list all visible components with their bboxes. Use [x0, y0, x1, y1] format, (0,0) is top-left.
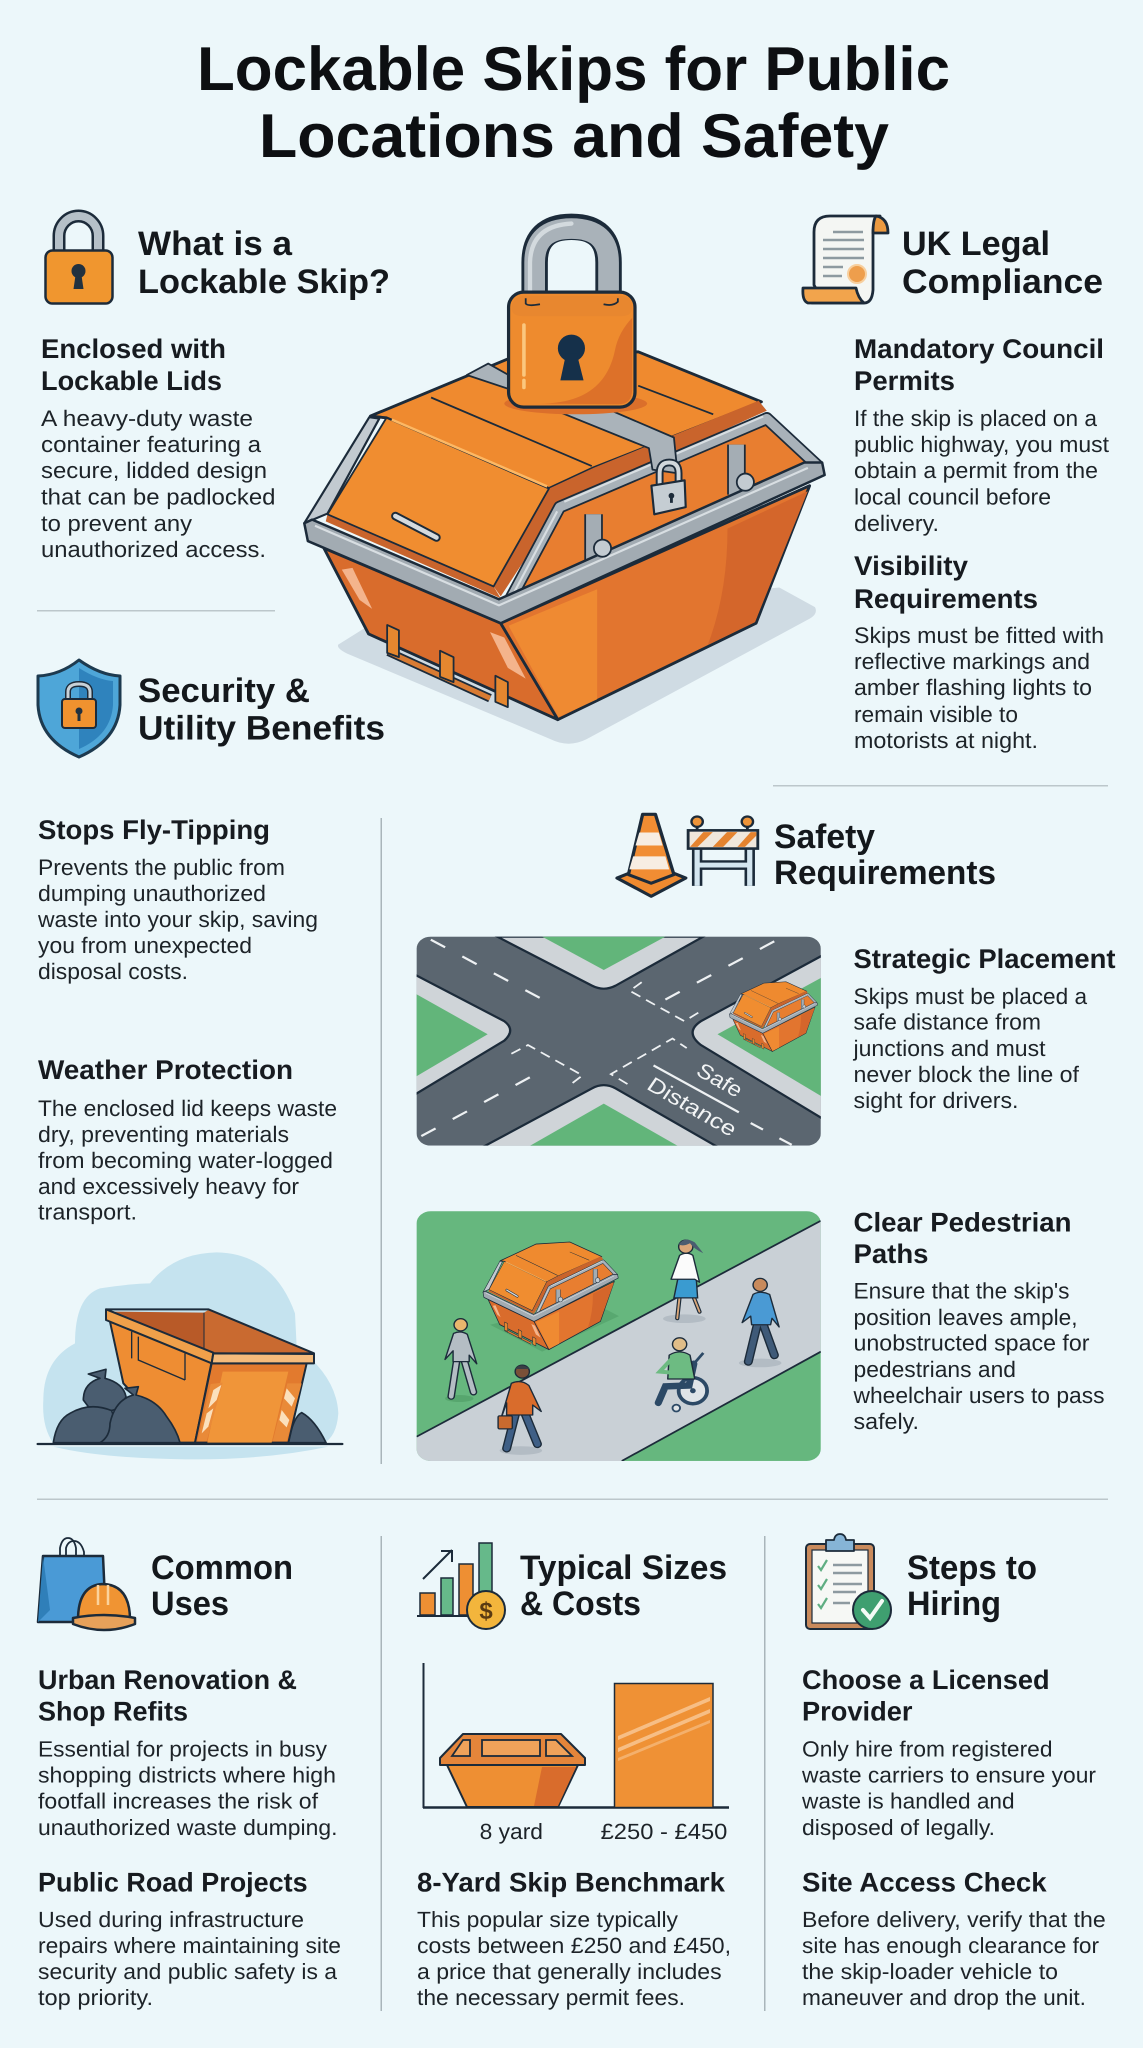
subheading: visibility requirements: Visibility: [854, 551, 968, 581]
title: Locations and Safety: [259, 102, 890, 171]
subheading: [41, 334, 226, 396]
text: strategic placement: never block the line of: [854, 1062, 1080, 1087]
body text: licensed provider: Only hire from registered: [802, 1737, 1052, 1762]
icon: skip on road corner: [729, 982, 818, 1052]
icon: skip beside pavement: [483, 1242, 618, 1350]
blue pedestrian: [742, 1278, 779, 1362]
heading: Utility Benefits: [138, 710, 385, 748]
body text: to prevent any: [41, 511, 193, 536]
body text: licensed provider: disposed of legally.: [802, 1815, 995, 1840]
body text: unauthorized access.: [41, 537, 266, 562]
icon: clipboard with check: [806, 1534, 891, 1629]
text: clear pedestrian paths: pedestrians and: [854, 1357, 1016, 1382]
subheading: mandatory council permits: Permits: [854, 366, 955, 396]
body text: licensed provider: waste carriers to ensure your: [801, 1763, 1096, 1788]
body text: permits: delivery.: [854, 511, 939, 536]
subheading: site access check: Site Access Check: [802, 1868, 1048, 1898]
skip shadow: [338, 587, 816, 744]
body text: visibility: reflective markings and: [854, 649, 1090, 674]
lock shadow on lid: [504, 393, 647, 414]
body text: licensed provider: [801, 1737, 1096, 1840]
body text: licensed provider: waste is handled and: [801, 1789, 1015, 1814]
body text: container featuring a: [41, 432, 262, 457]
text: strategic placement: Strategic Placement: [854, 944, 1116, 974]
body text: benchmark: costs between £250 and £450,: [417, 1933, 731, 1958]
heading: Safety: [774, 818, 875, 856]
subheading: licensed provider: Choose a Licensed: [802, 1665, 1050, 1695]
body text: visibility: remain visible to: [854, 702, 1018, 727]
body text: permits: obtain a permit from the: [854, 458, 1098, 483]
body text: public road projects: top priority.: [38, 1985, 153, 2010]
heading: Hiring: [907, 1585, 1001, 1623]
body text: fly-tipping: waste into your skip, saving: [37, 907, 318, 932]
icon: shopping bag and hard hat: [38, 1538, 135, 1630]
text: clear pedestrian paths: position leaves ample,: [854, 1305, 1078, 1330]
subheading: urban renovation: Urban Renovation &: [38, 1665, 297, 1695]
text: clear pedestrian paths: wheelchair users to pass: [852, 1383, 1104, 1408]
heading: [520, 1549, 727, 1623]
cost bar: [614, 1684, 713, 1808]
subheading: Lockable Lids: [41, 366, 222, 396]
body text: site access check: site has enough clearance for: [802, 1933, 1099, 1958]
heading: [902, 225, 1103, 301]
body text: permits: [854, 406, 1110, 536]
safe distance label: Distance: [643, 1073, 741, 1141]
metal strap: [467, 364, 677, 473]
body text: fly-tipping: dumping unauthorized: [38, 881, 266, 906]
panel: common uses: [38, 1538, 341, 2010]
panel: steps to hiring: [801, 1534, 1106, 2010]
icon: shield: [38, 660, 120, 757]
title: [197, 35, 950, 171]
icon: padlock: [46, 216, 112, 304]
body text: visibility: Skips must be fitted with: [854, 623, 1104, 648]
body text: weather: and excessively heavy for: [38, 1174, 300, 1199]
heading: [774, 818, 996, 892]
illustration: pedestrian path: [417, 1211, 821, 1461]
subheading: Enclosed with: [41, 334, 226, 364]
subheading: licensed provider: [802, 1665, 1050, 1727]
panel: UK legal compliance: [803, 216, 1110, 753]
grey pedestrian: [445, 1319, 477, 1396]
bar chart: skip size and cost: 8 yard: [480, 1819, 543, 1844]
illustration: open skip with waste bags: [38, 1252, 342, 1459]
large padlock: [509, 224, 635, 407]
text: clear pedestrian paths: Paths: [854, 1239, 928, 1269]
subheading: urban renovation: Shop Refits: [38, 1697, 188, 1727]
body text: site access check: [802, 1907, 1106, 2010]
body text: urban renovation: Essential for projects in busy: [38, 1737, 327, 1762]
body text: benchmark: This popular size typically: [417, 1907, 678, 1932]
subheading: weather protection: Weather Protection: [38, 1055, 293, 1085]
icon: cone and barrier: [617, 814, 758, 896]
heading: [151, 1549, 293, 1623]
body text: fly-tipping: Prevents the public from: [38, 855, 285, 880]
text: clear pedestrian paths: Clear Pedestrian: [854, 1208, 1072, 1238]
body text: visibility: amber flashing lights to: [854, 675, 1092, 700]
panel: typical sizes and costs: [417, 1543, 731, 2010]
icon: rising bars with coin: [417, 1543, 505, 1629]
skip graphic: [440, 1734, 585, 1807]
body text: weather: The enclosed lid keeps waste: [38, 1096, 337, 1121]
subheading: visibility requirements: Requirements: [854, 584, 1038, 614]
body text: permits: public highway, you must: [854, 432, 1110, 457]
text: clear pedestrian paths: [852, 1208, 1104, 1434]
safe distance label: Safe: [692, 1059, 747, 1102]
subheading: benchmark: 8-Yard Skip Benchmark: [417, 1868, 726, 1898]
heading: [138, 672, 385, 748]
body text: public road projects: security and public safety is a: [38, 1959, 338, 1984]
body text: benchmark: the necessary permit fees.: [417, 1985, 685, 2010]
illustration: road junction with safe distance: [414, 937, 823, 1147]
body text: urban renovation: footfall increases the risk of: [38, 1789, 319, 1814]
heading: [138, 225, 390, 301]
text: clear pedestrian paths: unobstructed space for: [854, 1331, 1090, 1356]
panel: benefits text: [37, 815, 337, 1224]
body text: public road projects: repairs where maintaining site: [38, 1933, 341, 1958]
subheading: mandatory council permits: [854, 334, 1104, 396]
heading: Security &: [138, 672, 310, 710]
small padlock: [651, 462, 686, 514]
text: clear pedestrian paths: Ensure that the skip's: [854, 1279, 1070, 1304]
panel: what is a lockable skip: [41, 216, 390, 562]
text: clear pedestrian paths: safely.: [854, 1409, 919, 1434]
heading: Typical Sizes: [520, 1549, 727, 1587]
body text: weather: from becoming water-logged: [38, 1148, 333, 1173]
body text: that can be padlocked: [41, 484, 276, 510]
body text: benchmark: a price that generally includes: [417, 1959, 722, 1984]
text: strategic placement: safe distance from: [854, 1010, 1041, 1034]
heading: What is a: [138, 225, 293, 263]
heading: Steps to: [907, 1549, 1037, 1587]
body text: urban renovation: unauthorized waste dumping.: [38, 1815, 338, 1840]
body text: [41, 406, 276, 562]
body text: weather: [38, 1096, 337, 1224]
text: strategic placement: sight for drivers.: [854, 1088, 1018, 1113]
body text: public road projects: Used during infrastructure: [38, 1907, 304, 1932]
panel: safety requirements: [414, 814, 1116, 1461]
body text: fly-tipping: [37, 855, 318, 984]
subheading: licensed provider: Provider: [802, 1697, 913, 1727]
body text: urban renovation: [38, 1737, 338, 1840]
body text: visibility: [854, 623, 1104, 753]
heading: Compliance: [902, 263, 1103, 301]
subheading: urban renovation: [38, 1665, 297, 1727]
body text: permits: If the skip is placed on a: [854, 406, 1097, 431]
heading: & Costs: [520, 1585, 641, 1623]
body text: urban renovation: shopping districts where high: [38, 1763, 336, 1788]
subheading: mandatory council permits: Mandatory Council: [854, 334, 1104, 364]
body text: site access check: maneuver and drop the unit.: [802, 1985, 1086, 2010]
body text: site access check: the skip-loader vehicle to: [802, 1959, 1058, 1984]
heading: Uses: [151, 1585, 229, 1623]
text: strategic placement: junctions and must: [852, 1036, 1046, 1061]
text: strategic placement: Skips must be placed a: [854, 984, 1087, 1009]
body text: A heavy-duty waste: [41, 406, 253, 431]
icon: legal scroll: [803, 216, 888, 303]
wheelchair user: [658, 1338, 707, 1412]
body text: benchmark: [417, 1907, 731, 2010]
illustration: main lockable skip with padlock: [304, 224, 825, 744]
text: strategic placement: [852, 944, 1116, 1113]
bar chart: skip size and cost: [423, 1663, 729, 1844]
heading: Requirements: [774, 854, 996, 892]
icon: rising bars with coin: $: [479, 1598, 493, 1625]
body text: weather: transport.: [38, 1200, 137, 1224]
bar chart: skip size and cost: £250 - £450: [601, 1819, 727, 1844]
body text: fly-tipping: you from unexpected: [38, 933, 252, 958]
heading: [907, 1549, 1037, 1623]
subheading: public road projects: Public Road Projects: [38, 1868, 308, 1898]
body text: fly-tipping: disposal costs.: [38, 959, 188, 984]
heading: Common: [151, 1549, 293, 1587]
body text: public road projects: [38, 1907, 341, 2010]
orange pedestrian: [498, 1365, 541, 1448]
heading: UK Legal: [902, 225, 1050, 263]
body text: visibility: motorists at night.: [854, 728, 1038, 753]
subheading: stops fly-tipping: Stops Fly-Tipping: [38, 815, 270, 845]
heading: Lockable Skip?: [138, 263, 390, 301]
title: Lockable Skips for Public: [197, 35, 950, 104]
body text: secure, lidded design: [41, 458, 267, 483]
body text: permits: local council before: [854, 484, 1051, 510]
body text: weather: dry, preventing materials: [38, 1122, 289, 1147]
subheading: visibility requirements: [854, 551, 1038, 614]
woman pedestrian: [671, 1240, 703, 1318]
panel: security and utility benefits header: [38, 660, 385, 757]
body text: site access check: Before delivery, verify that the: [802, 1907, 1106, 1932]
